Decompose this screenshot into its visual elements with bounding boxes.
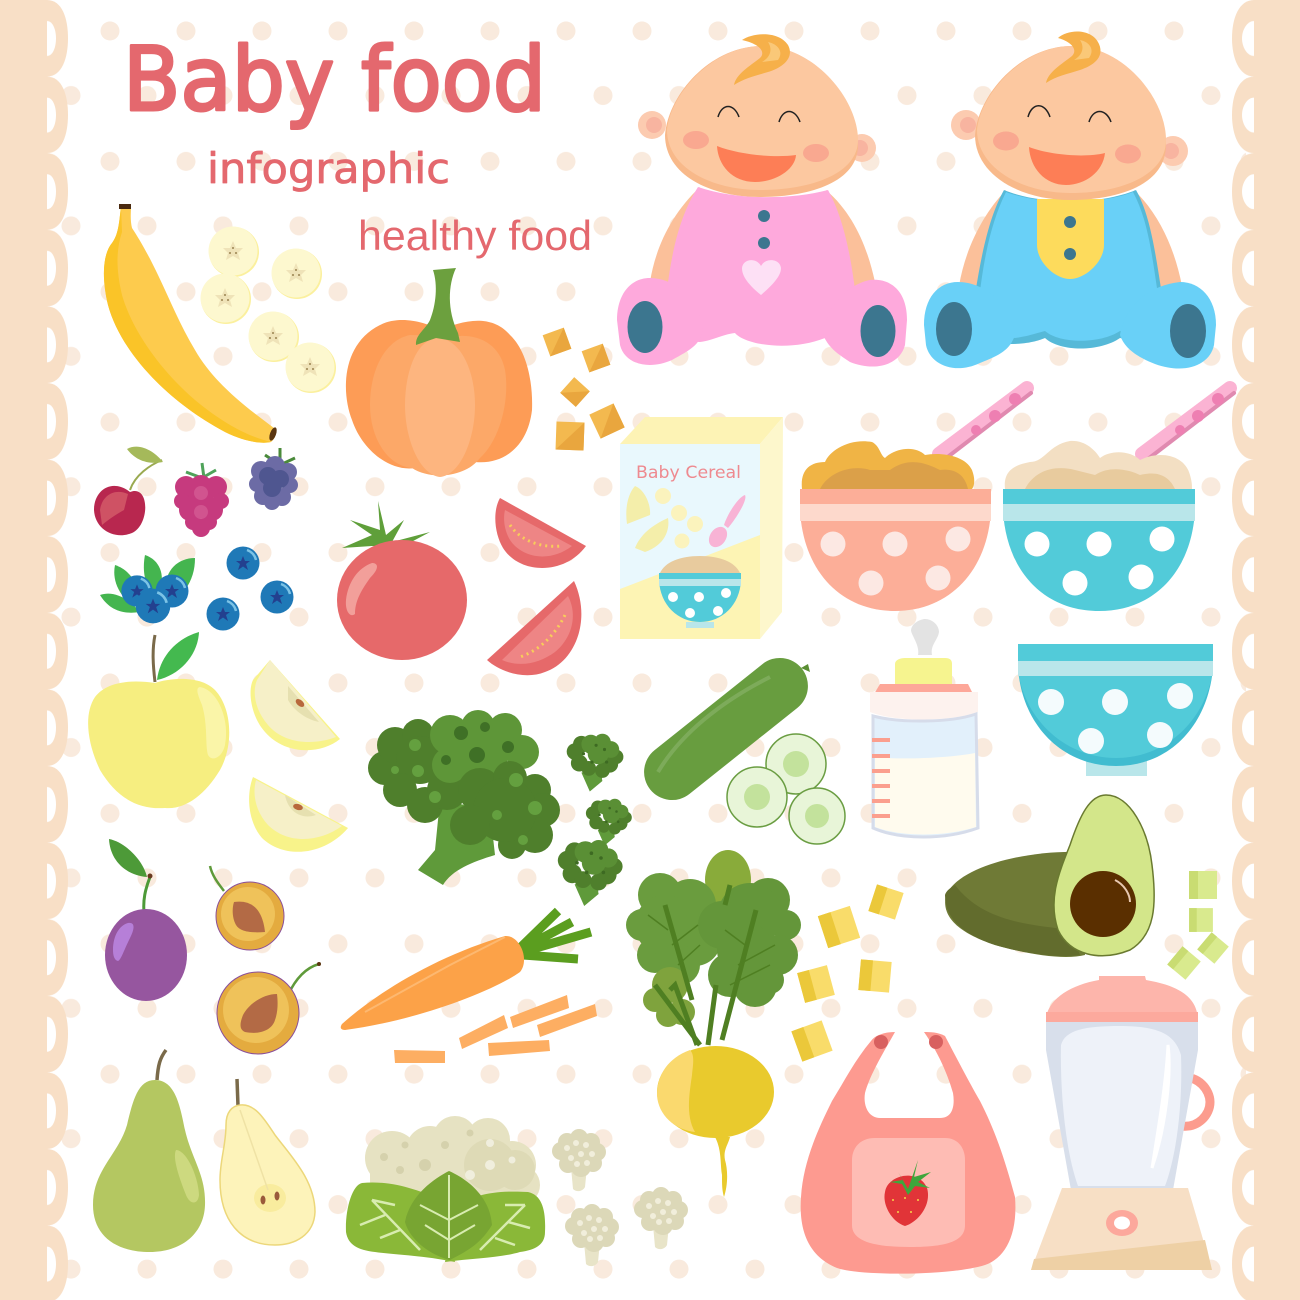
pumpkin (346, 268, 532, 477)
lid (1046, 976, 1198, 1021)
hair (1046, 32, 1101, 83)
head (975, 46, 1166, 200)
raspberry (174, 463, 229, 537)
ears (951, 110, 981, 140)
body (666, 187, 855, 346)
plum (105, 839, 187, 1001)
empty blue bowl (1018, 644, 1213, 776)
banana (104, 204, 278, 443)
base (1031, 1188, 1212, 1270)
box illustration: bowl (659, 556, 741, 628)
cauliflower (346, 1116, 545, 1262)
broccoli (368, 710, 560, 885)
apple (88, 632, 229, 808)
box label: Baby Cereal (636, 463, 741, 483)
bowl with orange puree and spoon (800, 388, 1031, 611)
turnip cubes (791, 884, 904, 1062)
cereal box (620, 417, 783, 639)
bib (1037, 199, 1104, 279)
hair (734, 34, 790, 85)
cheeks (683, 131, 709, 149)
buttons (1064, 216, 1076, 228)
apple slices (249, 660, 348, 852)
cherry (94, 447, 163, 535)
cucumber (633, 647, 819, 811)
jar (1046, 1021, 1198, 1190)
feet (924, 282, 1015, 368)
left scalloped border (0, 0, 70, 1300)
banana slices (200, 226, 336, 393)
cucumber slices (727, 734, 845, 844)
pumpkin cubes (543, 328, 625, 450)
head (665, 46, 858, 197)
title: Baby food (123, 28, 546, 131)
carrot (341, 911, 591, 1030)
avocado cubes (1167, 871, 1229, 980)
small cauliflower florets (552, 1129, 688, 1266)
tomato wedges (487, 498, 586, 675)
body (975, 190, 1162, 348)
buttons and heart (758, 210, 770, 222)
plum halves (210, 866, 321, 1054)
bowl with oatmeal and spoon (1003, 388, 1234, 611)
tomato (337, 501, 467, 660)
right scalloped border (1230, 0, 1300, 1300)
carrot sticks (394, 995, 597, 1063)
arms (650, 187, 875, 300)
cheeks (993, 132, 1019, 150)
mouth (1029, 147, 1105, 185)
small broccoli florets (558, 734, 632, 906)
bib (801, 1032, 1015, 1274)
baby bottle (870, 619, 978, 837)
blueberries (206, 546, 294, 630)
blueberry cluster (100, 555, 195, 623)
turnip with greens (626, 850, 801, 1197)
handle (1182, 1078, 1210, 1126)
subtitle: infographic: infographic (207, 144, 450, 193)
ears (638, 111, 666, 139)
box illustration: apple slices and banana (626, 486, 745, 552)
baby boy (924, 32, 1216, 369)
arms (959, 190, 1182, 300)
mouth (717, 146, 796, 182)
strawberry (884, 1160, 931, 1226)
subtitle: healthy food: healthy food (358, 212, 592, 259)
baby girl (617, 34, 907, 367)
avocado (945, 795, 1154, 957)
blender (1031, 976, 1212, 1270)
eyes (1028, 106, 1111, 122)
blackberry (249, 448, 298, 510)
half pear (220, 1079, 315, 1245)
bib pocket (852, 1138, 965, 1247)
eyes (718, 106, 800, 122)
whole pear (93, 1050, 205, 1252)
feet (617, 278, 703, 365)
